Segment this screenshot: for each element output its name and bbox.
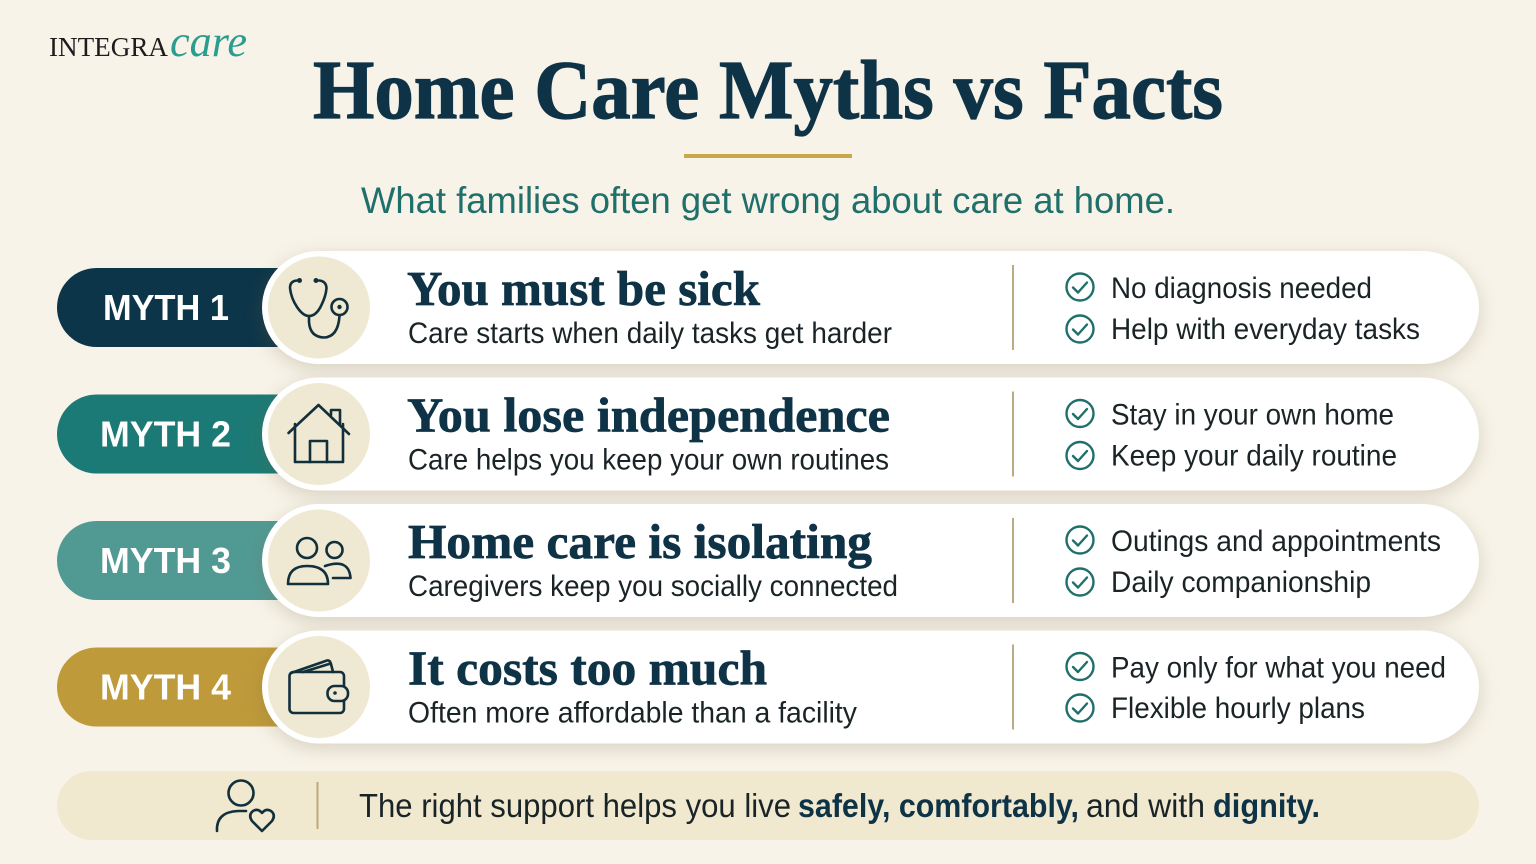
myth 4 pill <box>57 648 317 726</box>
footer message: The right support helps you live <box>359 787 791 824</box>
myth 3 facts <box>1066 525 1441 599</box>
myth 4 pill: MYTH 4 <box>100 666 231 708</box>
subtitle: What families often get wrong about care at home. <box>361 180 1175 221</box>
myth 1 facts: No diagnosis needed <box>1111 272 1372 305</box>
footer message: and with <box>1086 787 1205 824</box>
myth 2 card <box>262 378 1479 490</box>
icon: stethoscope <box>268 256 370 358</box>
row: myth 1 <box>57 251 1479 364</box>
myth 2 facts: Stay in your own home <box>1111 398 1394 432</box>
myth 3 heading: Home care is isolating <box>408 514 873 569</box>
footer banner <box>57 771 1479 840</box>
myth 4 facts: Flexible hourly plans <box>1111 692 1365 725</box>
icon: wallet <box>268 636 370 738</box>
myth 2 pill <box>57 394 317 474</box>
myth 3 pill <box>57 521 317 600</box>
myth 1 facts: Help with everyday tasks <box>1111 313 1420 346</box>
myth 2 facts <box>1066 398 1397 472</box>
myth 1 facts <box>1066 272 1420 346</box>
footer message: safely, comfortably, <box>798 787 1079 824</box>
myth 3 facts: Daily companionship <box>1111 566 1371 599</box>
icon: people <box>268 510 370 612</box>
myth 2 description: Care helps you keep your own routines <box>408 444 889 476</box>
myth 3 card <box>262 504 1479 617</box>
icon: house <box>268 383 370 485</box>
myth 1 description: Care starts when daily tasks get harder <box>408 317 892 350</box>
icon: person with heart <box>217 780 274 831</box>
myth 2 facts: Keep your daily routine <box>1111 440 1397 472</box>
row: myth 4 <box>57 630 1479 744</box>
logo: INTEGRA <box>49 32 169 62</box>
footer message <box>359 787 1320 824</box>
myth 4 description: Often more affordable than a facility <box>408 696 857 730</box>
myth 1 heading: You must be sick <box>407 261 761 316</box>
myth 1 pill <box>57 268 317 347</box>
myth 3 facts: Outings and appointments <box>1111 525 1441 558</box>
row: myth 3 <box>57 504 1479 617</box>
myth 4 card <box>262 630 1479 744</box>
myth 3 pill: MYTH 3 <box>100 540 231 581</box>
row: myth 2 <box>57 378 1479 490</box>
logo <box>49 17 247 66</box>
myth 1 card <box>262 251 1479 364</box>
myth 3 description: Caregivers keep you socially connected <box>408 570 898 603</box>
title: Home Care Myths vs Facts <box>313 44 1223 137</box>
myth 1 pill: MYTH 1 <box>103 287 229 328</box>
logo: care <box>170 17 247 66</box>
myth 2 heading: You lose independence <box>407 388 890 442</box>
myth 4 facts: Pay only for what you need <box>1111 652 1446 684</box>
myth 4 heading: It costs too much <box>408 640 767 696</box>
footer message: dignity. <box>1213 787 1320 824</box>
myth 2 pill: MYTH 2 <box>100 414 231 454</box>
myth 4 facts <box>1066 652 1446 725</box>
